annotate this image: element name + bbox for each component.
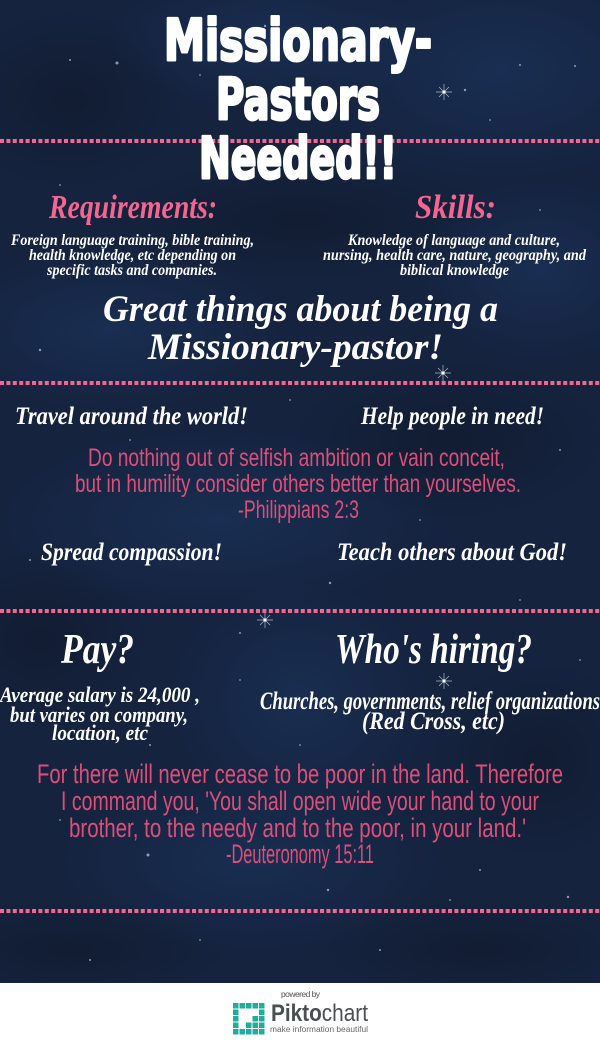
text: requirements: health knowledge, etc depending on bbox=[29, 247, 236, 264]
heading: pay: Pay? bbox=[60, 627, 134, 673]
title: Pastors bbox=[216, 67, 380, 133]
text: skills: biblical knowledge bbox=[400, 262, 509, 279]
panel: pay bbox=[0, 627, 200, 745]
heading: skills: Skills: bbox=[415, 189, 496, 226]
text: skills: Knowledge of language and culture, bbox=[347, 232, 560, 249]
powered by: powered by bbox=[281, 989, 321, 999]
heading: great things: Great things about being a bbox=[103, 289, 498, 330]
quote: Deuteronomy: -Deuteronomy 15:11 bbox=[226, 839, 374, 869]
heading: great things bbox=[103, 289, 498, 368]
wordmark: Piktochart bbox=[271, 1000, 368, 1027]
text: requirements: specific tasks and companies. bbox=[46, 262, 217, 279]
benefit: help: Help people in need! bbox=[360, 403, 544, 430]
benefit: travel: Travel around the world! bbox=[15, 403, 248, 430]
text: pay: location, etc bbox=[52, 720, 148, 745]
quote: Philippians: -Philippians 2:3 bbox=[238, 496, 359, 524]
text: pay: Average salary is 24,000 , bbox=[0, 682, 200, 707]
title: Missionary- bbox=[164, 8, 432, 74]
heading: requirements: Requirements: bbox=[48, 189, 217, 226]
benefits list bbox=[15, 403, 567, 566]
heading: great things: Missionary-pastor! bbox=[147, 327, 443, 368]
text: pay bbox=[0, 682, 200, 745]
text: who's hiring bbox=[260, 688, 600, 735]
text: requirements: Foreign language training, bible training, bbox=[10, 232, 254, 249]
text: skills bbox=[323, 232, 587, 279]
quote: Philippians bbox=[75, 444, 521, 524]
text: pay: but varies on company, bbox=[10, 702, 188, 727]
heading: who's hiring: Who's hiring? bbox=[335, 627, 532, 673]
title bbox=[164, 8, 432, 192]
icon: piktochart logo bbox=[233, 1003, 264, 1034]
quote: Deuteronomy bbox=[37, 759, 563, 869]
tagline: make information beautiful bbox=[270, 1025, 368, 1034]
panel: skills bbox=[323, 189, 587, 279]
title: Needed!! bbox=[199, 126, 397, 192]
panel: requirements bbox=[10, 189, 254, 279]
text: who's hiring: (Red Cross, etc) bbox=[362, 708, 505, 735]
dotted dividers bbox=[0, 141, 600, 911]
benefit: teach: Teach others about God! bbox=[337, 539, 567, 566]
benefit: compassion: Spread compassion! bbox=[41, 539, 222, 566]
footer band bbox=[0, 983, 600, 1043]
text: requirements bbox=[10, 232, 254, 279]
panel: who's hiring bbox=[260, 627, 600, 735]
